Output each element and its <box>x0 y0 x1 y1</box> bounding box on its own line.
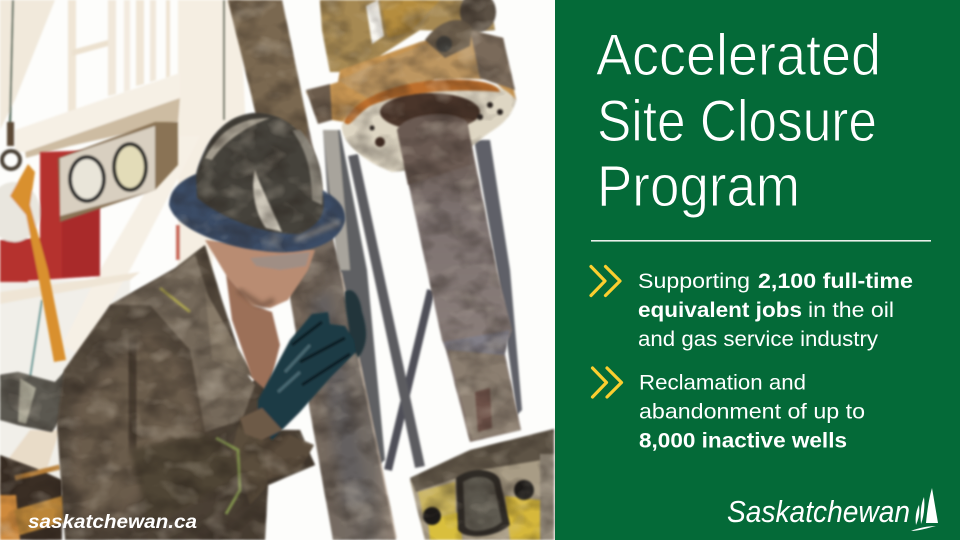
title <box>596 23 881 219</box>
rusty clamp <box>306 0 516 172</box>
central stem <box>397 114 521 442</box>
bullet: jobs: in the oil <box>808 299 894 322</box>
photo panel: oil rig worker <box>0 0 555 540</box>
worker <box>57 113 366 540</box>
bullet: jobs: equivalent jobs <box>638 299 802 322</box>
bullet: wells: Reclamation and <box>639 372 806 394</box>
left glove and orange equipment <box>0 370 66 540</box>
bullet: wells <box>639 372 865 452</box>
website url: saskatchewan.ca <box>28 511 197 533</box>
bottom right wellhead block <box>410 429 554 540</box>
icon: chevrons 2 <box>592 368 622 397</box>
jacket <box>57 245 315 540</box>
divider <box>591 240 931 242</box>
bullet: wells: 8,000 inactive wells <box>639 430 847 452</box>
title: Program <box>597 154 800 219</box>
pressure gauges <box>58 122 178 222</box>
bullet: jobs: Supporting <box>638 270 750 293</box>
title: Accelerated <box>596 23 881 88</box>
green content panel <box>555 0 960 540</box>
red machine and orange arm <box>0 122 100 362</box>
icon: wheat leaf <box>911 488 938 531</box>
bullet: jobs: and gas service industry <box>638 328 879 351</box>
rig structure background <box>0 0 246 510</box>
bullet: jobs: 2,100 full-time <box>758 270 913 293</box>
bullet: wells: abandonment of up to <box>639 400 865 424</box>
skin: face and chest <box>205 240 315 392</box>
background pipes and rods <box>323 130 522 470</box>
icon: chevrons 1 <box>591 266 620 296</box>
main pipe <box>228 0 396 540</box>
logo: Saskatchewan: Saskatchewan <box>727 494 910 529</box>
title: Site Closure <box>597 89 877 154</box>
hard hat <box>169 113 345 252</box>
gloved hands <box>240 290 366 440</box>
bullet: jobs <box>638 270 913 351</box>
